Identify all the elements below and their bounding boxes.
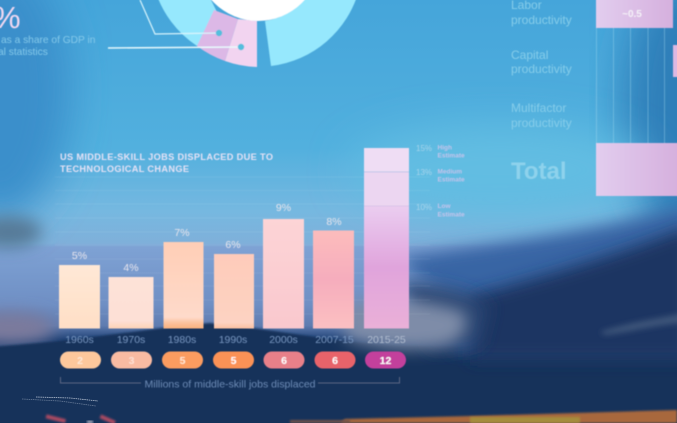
- millions displaced pills: 2: [77, 355, 83, 367]
- percentage labels: 4%: [123, 262, 139, 274]
- leader line to pink segment: [108, 44, 244, 50]
- donut: left cyan segment: [155, 0, 218, 46]
- period labels: 1980s: [168, 334, 196, 346]
- millions displaced pills: 5: [180, 355, 186, 367]
- donut: right cyan segment: [265, 0, 359, 66]
- donut: white centre: [196, 0, 320, 21]
- period labels: [65, 334, 406, 346]
- period labels: 1960s: [65, 334, 94, 346]
- period labels: 2015-25: [367, 334, 406, 346]
- value: labor: ~0.5: [622, 9, 642, 20]
- percentage labels: 5%: [72, 250, 87, 262]
- percentage labels: 7%: [174, 227, 190, 239]
- millions displaced pills: [60, 352, 406, 368]
- estimate legend: Estimate: [438, 152, 465, 160]
- bar: labor: [596, 0, 673, 28]
- label: capital productivity: productivity: [511, 62, 572, 76]
- chart title: TECHNOLOGICAL CHANGE: [60, 164, 189, 174]
- horizontal grid: [55, 177, 430, 314]
- panel: productivity table (cropped): [511, 0, 677, 196]
- estimate legend: High: [438, 144, 452, 152]
- millions displaced pills: 5: [231, 355, 237, 367]
- percentage labels: [72, 202, 342, 274]
- millions displaced pills: 6: [281, 355, 287, 367]
- period labels: 1990s: [219, 334, 247, 346]
- bracket and caption: [60, 377, 400, 390]
- millions displaced pills: 3: [129, 355, 135, 367]
- panel: displaced jobs bar chart: [55, 144, 465, 390]
- chart title: US MIDDLE-SKILL JOBS DISPLACED DUE TO: [60, 152, 273, 162]
- label: multifactor productivity: Multifactor: [511, 101, 566, 115]
- millions displaced pills: 12: [380, 355, 391, 367]
- bar: capital: [673, 45, 677, 77]
- estimate legend: Low: [438, 203, 451, 210]
- period labels: 2007-15: [315, 334, 354, 346]
- label: total: Total: [511, 158, 567, 185]
- grid lines: [596, 28, 664, 143]
- percentage labels: 6%: [225, 239, 241, 251]
- label: capital productivity: Capital: [511, 48, 548, 62]
- donut chart: [108, 0, 359, 67]
- percentage labels: 9%: [276, 202, 291, 214]
- label: labor productivity: productivity: [511, 13, 572, 27]
- donut: pale pink segment: [225, 19, 257, 67]
- estimate legend: Estimate: [438, 176, 465, 184]
- donut: purple segment: [197, 10, 238, 61]
- estimate legend: 13%: [416, 168, 432, 177]
- estimate legend: 15%: [416, 144, 432, 153]
- bar: total: [596, 143, 677, 196]
- bars: [59, 148, 409, 328]
- bracket and caption: Millions of middle-skill jobs displaced: [144, 378, 316, 390]
- estimate legend: [416, 144, 465, 218]
- estimate legend: Estimate: [438, 212, 465, 218]
- period labels: 2000s: [269, 334, 298, 346]
- panel: GDP share summary (cropped): [0, 0, 95, 58]
- label: multifactor productivity: productivity: [511, 116, 572, 130]
- estimate legend: 10%: [416, 203, 432, 212]
- leader line to purple segment: [140, 0, 222, 36]
- GDP share caption: as a share of GDP in: [1, 35, 95, 46]
- percentage labels: 8%: [326, 216, 342, 228]
- estimate legend: Medium: [438, 168, 462, 176]
- millions displaced pills: 6: [332, 355, 338, 367]
- period labels: 1970s: [117, 334, 145, 346]
